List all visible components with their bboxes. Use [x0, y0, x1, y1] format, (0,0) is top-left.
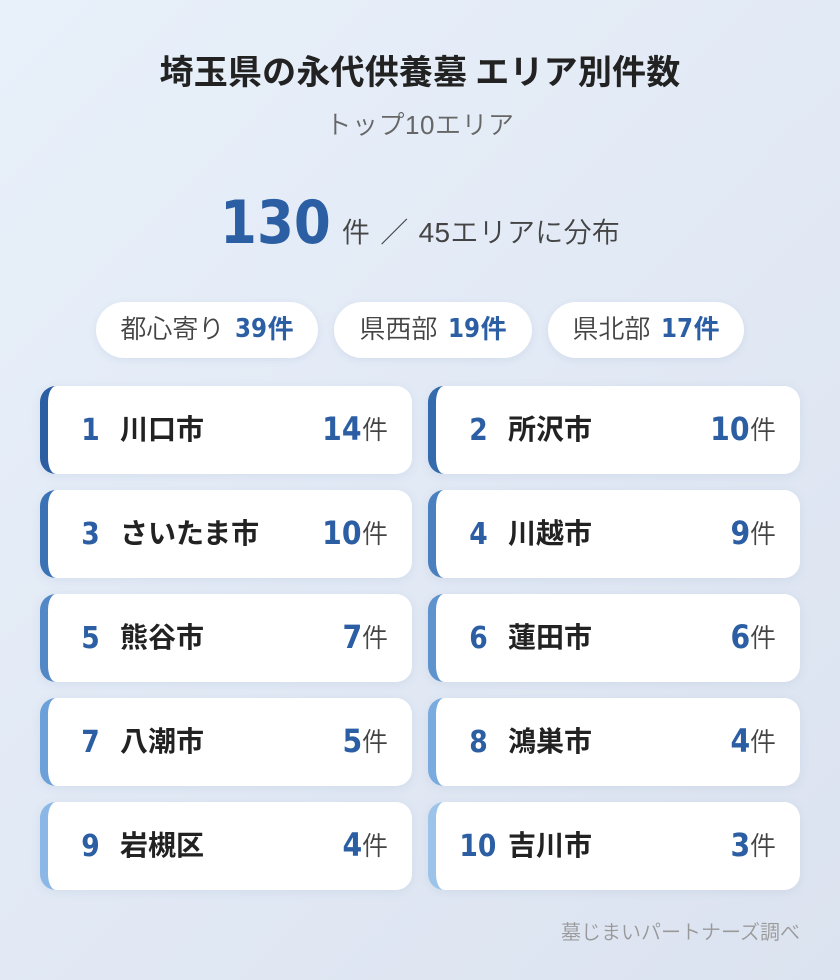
card: rank 8: 鴻巣市: [508, 720, 592, 760]
card: rank 4: 4: [469, 517, 487, 552]
card: rank 3: 件: [362, 514, 388, 551]
card: rank 9: 4: [342, 826, 362, 864]
card: rank 3: さいたま市: [120, 512, 259, 552]
card: rank 1: 14: [323, 410, 362, 448]
card: rank 6: 6: [730, 618, 750, 656]
card: rank 3: [40, 490, 412, 578]
card: rank 10: 件: [750, 826, 776, 863]
card: rank 4: 川越市: [508, 512, 592, 552]
card: rank 10: 3: [730, 826, 750, 864]
card: rank 8: [428, 698, 800, 786]
card: rank 5: 熊谷市: [120, 616, 204, 656]
card: rank 6: 蓮田市: [508, 616, 592, 656]
card: rank 1: [40, 386, 412, 474]
card: rank 3: 3: [81, 517, 99, 552]
pill: 県西部: [334, 302, 532, 358]
pill: 県北部: 17: [661, 314, 693, 344]
pill: 県西部: 19: [448, 314, 480, 344]
card: rank 6: [428, 594, 800, 682]
card: rank 2: 件: [750, 410, 776, 447]
card: rank 2: 10: [711, 410, 750, 448]
title: 埼玉県の永代供養墓 エリア別件数: [160, 45, 680, 94]
card: rank 9: 9: [81, 829, 99, 864]
pill: 県西部: 県西部 件: [359, 309, 507, 346]
pill: 都心寄り: [96, 302, 318, 358]
card: rank 7: 件: [362, 722, 388, 759]
pill: 都心寄り: 都心寄り 件: [120, 309, 294, 346]
card: rank 6: 件: [750, 618, 776, 655]
card: rank 1: 件: [362, 410, 388, 447]
card: rank 8: 8: [469, 725, 487, 760]
card: rank 3: 10: [323, 514, 362, 552]
card: rank 7: 5: [342, 722, 362, 760]
card: rank 9: 岩槻区: [120, 824, 204, 864]
card: rank 5: 7: [342, 618, 362, 656]
card: rank 9: [40, 802, 412, 890]
card: rank 5: 5: [81, 621, 99, 656]
card: rank 4: 9: [730, 514, 750, 552]
card: rank 8: 4: [730, 722, 750, 760]
card: rank 1: 川口市: [120, 408, 204, 448]
pill: 県北部: [548, 302, 744, 358]
pill: 県北部: 県北部 件: [572, 309, 720, 346]
card: rank 4: [428, 490, 800, 578]
card: rank 5: [40, 594, 412, 682]
card: rank 7: 八潮市: [120, 720, 204, 760]
source note: 墓じまいパートナーズ調べ: [561, 922, 800, 944]
card: rank 9: 件: [362, 826, 388, 863]
summary total: 件 ／ 45エリアに分布: [342, 217, 620, 248]
card: rank 7: 7: [81, 725, 99, 760]
card: rank 6: 6: [469, 621, 487, 656]
card: rank 5: 件: [362, 618, 388, 655]
subtitle: トップ10エリア: [326, 110, 514, 140]
summary total: 130: [220, 188, 331, 258]
card: rank 2: [428, 386, 800, 474]
card: rank 10: [428, 802, 800, 890]
summary total: [220, 188, 620, 258]
card: rank 10: 吉川市: [508, 824, 592, 864]
card: rank 8: 件: [750, 722, 776, 759]
card: rank 1: 1: [81, 413, 99, 448]
card: rank 4: 件: [750, 514, 776, 551]
card: rank 2: 所沢市: [508, 408, 592, 448]
card: rank 10: 10: [460, 829, 496, 864]
card: rank 7: [40, 698, 412, 786]
card: rank 2: 2: [469, 413, 487, 448]
pill: 都心寄り: 39: [235, 314, 267, 344]
